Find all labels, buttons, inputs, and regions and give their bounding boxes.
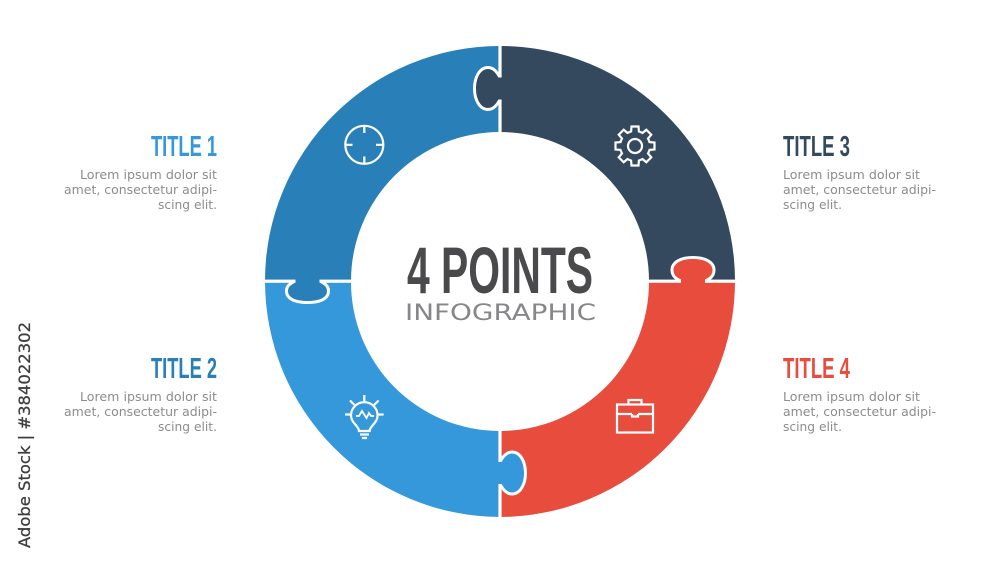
puzzle knob: bottom bbox=[497, 454, 524, 492]
body: title 4 bbox=[783, 390, 936, 434]
body: title 2: amet, consectetur adipi- bbox=[64, 405, 217, 419]
body: title 3 bbox=[783, 168, 936, 212]
body: title 1: amet, consectetur adipi- bbox=[64, 183, 217, 197]
puzzle knob: top bbox=[476, 69, 503, 108]
segment 4: bottom right bbox=[500, 281, 735, 517]
body: title 2 bbox=[64, 390, 217, 434]
segment 2: bottom left bbox=[265, 281, 500, 517]
horizontal gap bbox=[260, 280, 740, 283]
text block: title 4 bbox=[783, 353, 936, 434]
segment 1: top left bbox=[265, 46, 500, 281]
puzzle knob: left bbox=[288, 278, 327, 301]
segment 3: top right bbox=[500, 46, 735, 281]
body: title 3: scing elit. bbox=[783, 198, 842, 212]
text block: title 3 bbox=[783, 131, 936, 212]
subtitle: INFOGRAPHIC bbox=[405, 301, 596, 326]
text block: title 2 bbox=[64, 353, 217, 434]
body: title 1: Lorem ipsum dolor sit bbox=[80, 168, 217, 182]
text block: title 1 bbox=[64, 131, 217, 212]
main title: 4 POINTS bbox=[407, 233, 593, 307]
body: title 4: Lorem ipsum dolor sit bbox=[783, 390, 920, 404]
stock id caption: Adobe Stock | #384022302 bbox=[15, 322, 34, 548]
body: title 4: amet, consectetur adipi- bbox=[783, 405, 936, 419]
ring diagram bbox=[260, 40, 740, 522]
body: title 2: scing elit. bbox=[158, 420, 217, 434]
puzzle knob: right bbox=[674, 259, 712, 284]
icon: briefcase bbox=[617, 400, 653, 432]
body: title 1: scing elit. bbox=[158, 198, 217, 212]
icon: gear bbox=[616, 126, 654, 166]
heading: title 1: TITLE 1 bbox=[151, 131, 217, 163]
vertical gap bbox=[498, 40, 502, 522]
heading: title 4: TITLE 4 bbox=[783, 353, 850, 385]
body: title 3: amet, consectetur adipi- bbox=[783, 183, 936, 197]
center heading bbox=[405, 233, 596, 326]
body: title 1 bbox=[64, 168, 217, 212]
body: title 3: Lorem ipsum dolor sit bbox=[783, 168, 920, 182]
heading: title 2: TITLE 2 bbox=[151, 353, 217, 385]
heading: title 3: TITLE 3 bbox=[783, 131, 850, 163]
body: title 4: scing elit. bbox=[783, 420, 842, 434]
icon: light bulb bbox=[345, 395, 384, 438]
icon: target bbox=[345, 126, 383, 164]
body: title 2: Lorem ipsum dolor sit bbox=[80, 390, 217, 404]
